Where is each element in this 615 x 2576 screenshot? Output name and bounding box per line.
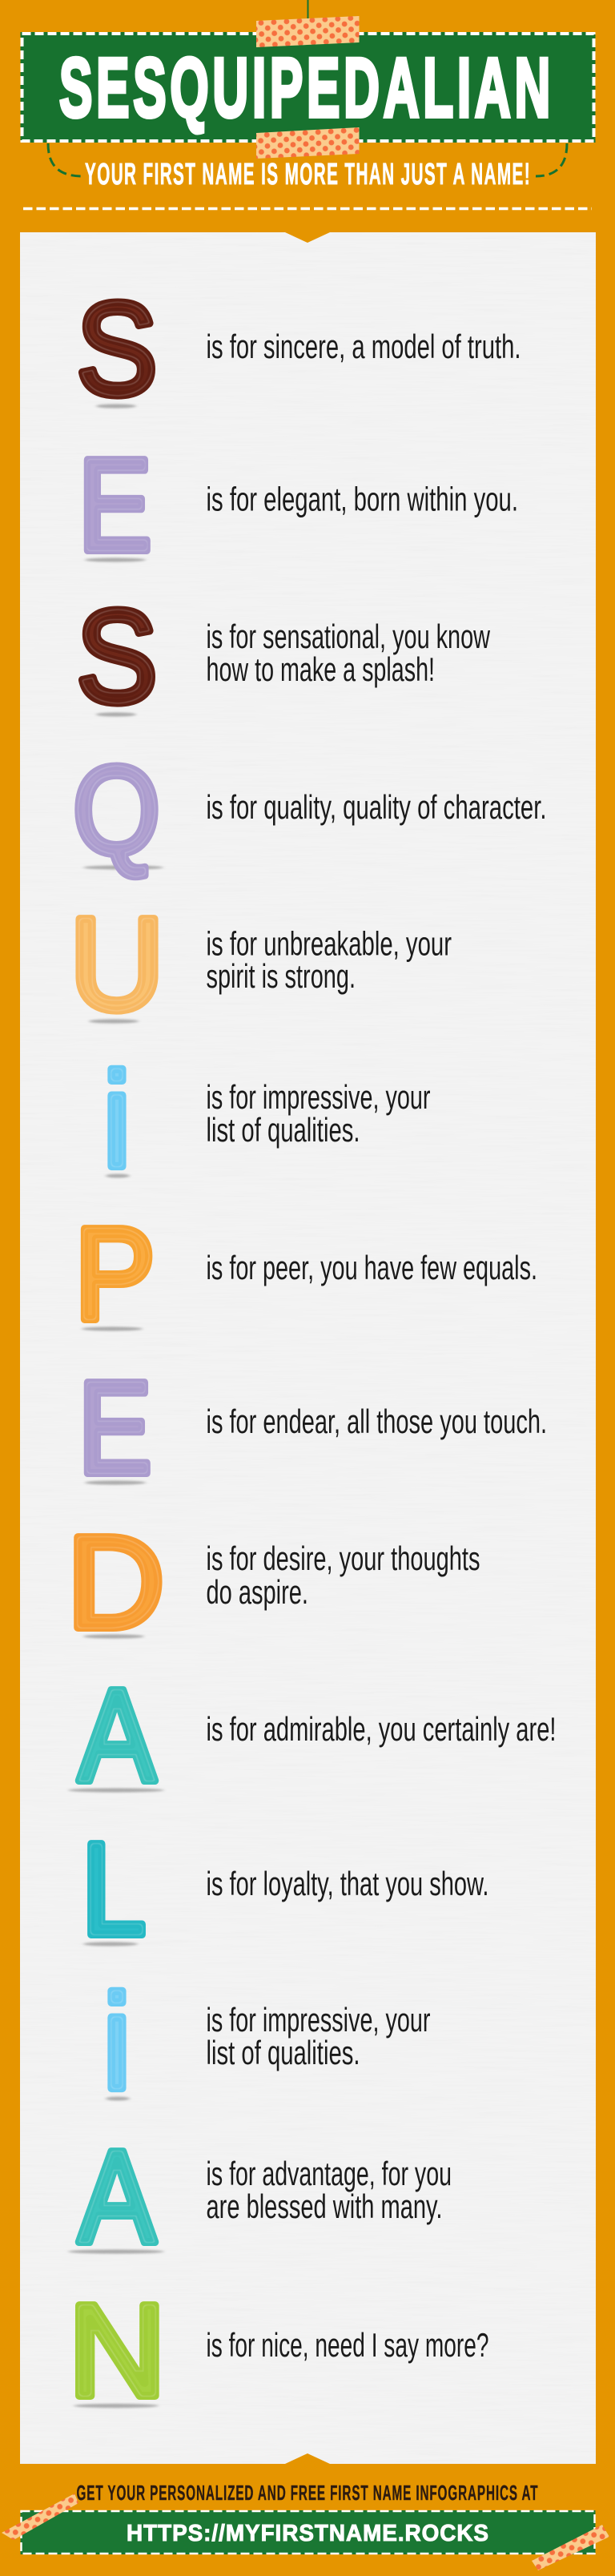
row: S sincere [77, 276, 521, 422]
text: spirit is strong. [207, 957, 356, 995]
text [207, 2155, 452, 2225]
text: is for impressive, your [207, 1078, 431, 1116]
text [207, 618, 490, 688]
letter U: U [70, 891, 164, 1037]
title banner [21, 32, 596, 143]
text [207, 924, 452, 995]
letter i: i [103, 1968, 131, 2117]
row: Q quality [73, 741, 546, 880]
letter i: i [103, 1046, 131, 1195]
text: list of qualities. [207, 1111, 360, 1149]
text [207, 1540, 480, 1611]
letter E: E [78, 1355, 152, 1502]
row: U unbreakable [70, 891, 452, 1037]
row: D desire [67, 1509, 480, 1656]
text: is for loyalty, that you show. [207, 1865, 488, 1902]
text: is for desire, your thoughts [207, 1540, 480, 1577]
letter Q: Q [73, 741, 160, 880]
letter S: S [77, 583, 157, 730]
hanging thread [308, 0, 309, 19]
row: L loyalty [82, 1816, 488, 1962]
text [207, 2001, 431, 2071]
bracket: left [48, 143, 82, 176]
letter N: N [68, 2277, 166, 2424]
text: is for unbreakable, your [207, 924, 452, 963]
tape: top [256, 16, 359, 47]
row: E endear [78, 1355, 547, 1502]
text: do aspire. [207, 1573, 308, 1611]
row: A advantage [68, 2123, 452, 2270]
text: is for impressive, your [207, 2001, 431, 2039]
row: i impressive (second) [103, 1968, 431, 2117]
letter P: P [74, 1201, 155, 1347]
row: P peer [74, 1201, 537, 1347]
text: is for advantage, for you [207, 2155, 452, 2192]
letter A: A [78, 1661, 155, 1809]
letter L: L [82, 1816, 146, 1962]
letter E: E [78, 433, 152, 579]
row: E elegant [78, 433, 518, 579]
text: is for sensational, you know [207, 618, 490, 655]
bracket: right [536, 143, 567, 176]
text: list of qualities. [207, 2034, 360, 2071]
footer banner [21, 2510, 596, 2554]
letter D: D [67, 1509, 164, 1656]
row: N nice [68, 2277, 489, 2424]
text: are blessed with many. [207, 2188, 442, 2225]
row: i impressive [103, 1046, 431, 1195]
text: how to make a splash! [207, 650, 435, 688]
footer url: HTTPS://MYFIRSTNAME.ROCKS [127, 2521, 489, 2546]
tape: footer left [2, 2493, 78, 2540]
row: S sensational [77, 583, 490, 730]
row: A admirable [68, 1661, 556, 1809]
letter S: S [77, 276, 157, 422]
divider [23, 207, 592, 210]
tape: middle [256, 127, 359, 159]
tape: footer right [532, 2525, 609, 2570]
text [207, 1078, 431, 1149]
letter A: A [78, 2123, 155, 2270]
